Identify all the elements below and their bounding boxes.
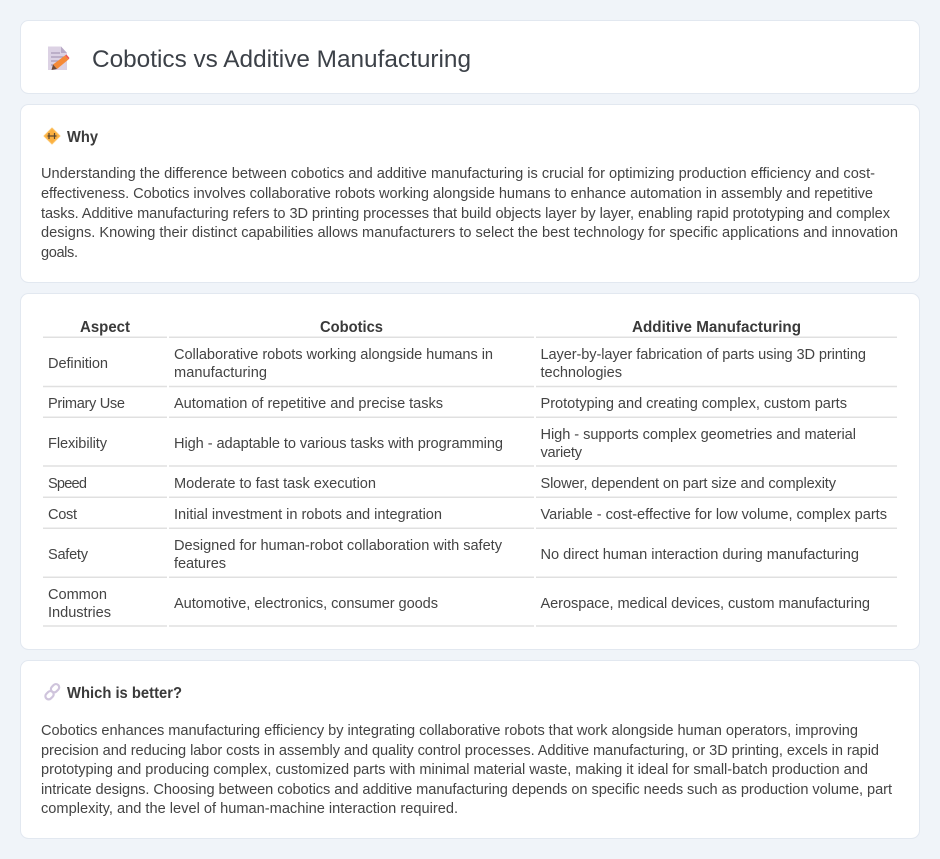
panel: header (20, 20, 920, 94)
text block: why paragraph: tasks. Additive manufacturing refers to 3D printing processes that build objects layer by layer, enabling rapid prototyping and complex (41, 206, 891, 222)
text block: why paragraph: effectiveness. Cobotics involves collaborative robots working alongside humans to enhance automation in assembly and repetitive (41, 186, 873, 202)
row: primary use: Automation of repetitive and precise tasks (174, 396, 443, 412)
heading: why: Why (67, 129, 98, 146)
text block: which is better paragraph: prototyping and producing complex, customized parts with minimal material waste, making it ideal for small-batch production and (41, 762, 868, 778)
text block: why paragraph: Understanding the difference between cobotics and additive manufacturing is crucial for optimizing production efficiency and cost- (41, 166, 875, 182)
title: Cobotics vs Additive Manufacturing (92, 46, 471, 73)
text block: which is better paragraph: Cobotics enhances manufacturing efficiency by integrating collaborative robots that work alongside human operators, improving (41, 723, 858, 739)
panel: comparison table (20, 294, 920, 650)
icon: memo with pencil (48, 46, 70, 70)
row: flexibility: variety (540, 445, 583, 461)
row: speed: Moderate to fast task execution (174, 476, 376, 492)
icon: link (44, 683, 61, 701)
row: flexibility (48, 427, 856, 461)
row: definition: Layer-by-layer fabrication of parts using 3D printing (540, 347, 866, 363)
row: definition: Collaborative robots working alongside humans in (174, 347, 493, 363)
text block: why paragraph (41, 166, 898, 261)
text block: why paragraph: designs. Knowing their distinct capabilities allows manufacturers to select the best technology for specific applications and innovation (41, 225, 898, 241)
row: cost: Cost (48, 507, 77, 523)
row: safety: Safety (48, 547, 89, 563)
row: safety: No direct human interaction during manufacturing (540, 547, 859, 563)
row: common industries: Industries (48, 605, 111, 621)
row: common industries: Common (48, 587, 107, 603)
text block: which is better paragraph: complexity, and the level of human-machine interaction required. (41, 801, 458, 817)
row: cost: Variable - cost-effective for low volume, complex parts (540, 507, 887, 523)
row: flexibility: High - adaptable to various tasks with programming (174, 436, 503, 452)
row: definition: Definition (48, 356, 108, 372)
text block: which is better paragraph (41, 723, 892, 817)
row: cost: Initial investment in robots and integration (174, 507, 442, 523)
row: common industries: Automotive, electronics, consumer goods (174, 596, 438, 612)
table header row: Aspect (80, 319, 131, 336)
text block: which is better paragraph: intricate designs. Choosing between cobotics and additive manufacturing depends on specific needs such as production volume, part (41, 782, 892, 798)
table header row (80, 319, 801, 336)
panel: why (20, 104, 920, 282)
row: primary use (48, 396, 847, 412)
row: safety: Designed for human-robot collaboration with safety (174, 538, 503, 554)
row: definition: manufacturing (174, 365, 267, 381)
row: speed: Slower, dependent on part size and complexity (540, 476, 837, 492)
row: safety: features (174, 556, 226, 572)
text block: which is better paragraph: precision and reducing labor costs in assembly and quality control processes. Additive manufacturing, or 3D printing, excels in rapid (41, 743, 879, 759)
row: speed (48, 476, 837, 492)
icon: diamond sign (44, 128, 60, 144)
row: flexibility: High - supports complex geometries and material (540, 427, 856, 443)
row: common industries: Aerospace, medical devices, custom manufacturing (540, 596, 870, 612)
row: flexibility: Flexibility (48, 436, 108, 452)
table header row: Additive Manufacturing (632, 319, 801, 336)
panel: which is better (20, 660, 920, 838)
row: speed: Speed (48, 476, 87, 492)
row: cost (48, 507, 887, 523)
table header row: Cobotics (320, 319, 383, 336)
row: primary use: Primary Use (48, 396, 125, 412)
row: common industries (48, 587, 870, 621)
row: safety (48, 538, 859, 572)
text block: why paragraph: goals. (41, 245, 78, 261)
row: definition: technologies (540, 365, 622, 381)
row: definition (48, 347, 866, 381)
row: primary use: Prototyping and creating complex, custom parts (540, 396, 847, 412)
heading: which is better: Which is better? (67, 685, 182, 702)
